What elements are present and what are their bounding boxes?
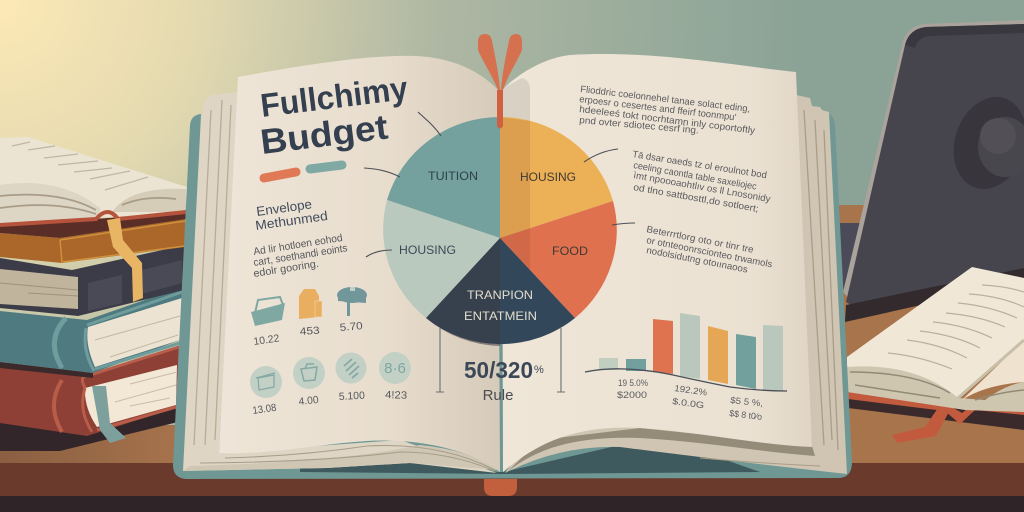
slice: housing right [500,117,613,238]
fold shade on pie [500,117,530,270]
laptop base [845,268,1024,322]
bar chart [585,313,787,422]
right paragraph two: od tlno sattbosttl,do sotloert; [632,182,759,215]
icon: pot badge [250,366,282,398]
spine shade band [500,78,530,290]
dark book [0,245,185,316]
envelope method text [253,232,348,280]
values: 5.100 [339,390,365,403]
slice: tuition [387,117,500,238]
right page [502,54,812,472]
orange book [0,213,186,263]
values: 10.22 [253,332,280,348]
icon: shopping bag [299,289,322,319]
teal book [0,287,182,378]
right paragraph one: erpoesr o cesertes and ffeirf toonmpu' [579,94,737,123]
red book [0,346,179,436]
slice: housing left [383,200,500,318]
title: Fullchimy [258,69,410,124]
slice: food [500,201,617,318]
label: entertainment: ENTATMEIN [464,309,537,323]
left page stack [183,92,497,473]
label: food: FOOD [552,244,588,258]
chart labels: $2000 [617,390,647,400]
icon row: expenses [251,287,367,348]
shadow under stack [0,405,178,451]
laptop lid [846,24,1024,308]
label: housing right: HOUSING [520,170,576,184]
values: 13.08 [252,402,277,417]
left page [219,56,500,472]
open book on the right [847,267,1024,443]
chart labels: $$ 8 t0⁄o [729,408,763,422]
values: 4.00 [298,394,319,408]
label: housing left: HOUSING [399,243,456,257]
pie chart [383,117,617,346]
yellow ribbon [107,218,143,302]
right paragraph one: pnd ovter sdiotec cesrf ing. [579,115,699,136]
envelope method heading: Methunmed [254,208,329,233]
right page stack [505,95,847,474]
values [252,389,407,417]
right paragraph one [579,84,756,137]
ribbon [892,402,951,443]
leader lines [364,112,635,392]
teal ribbon [92,386,126,443]
cover [173,113,852,479]
bottom ribbon tab [484,479,517,496]
icon: number badge: 8·6 [384,360,406,377]
values: 4!23 [385,389,407,402]
envelope method text: Ad lir hotloen eohod [253,232,344,258]
bookmark ribbon [478,34,522,128]
chart axis [585,369,787,391]
main open book [173,54,852,496]
laptop logo [942,87,1024,199]
envelope method heading [254,196,329,233]
slice: transportation [426,238,575,344]
right paragraph two: ceeling caontla table saxeliojec [632,160,758,193]
chart labels [617,378,764,422]
chart labels: $5 5 %, [730,395,764,408]
right paragraph one: hdeeleeś tokt nocrhtamn inly coportoftly [579,104,756,137]
icon: bag badge [293,357,325,389]
values: 453 [299,325,320,338]
values: 5.70 [339,320,363,334]
chart labels: 192.2% [674,383,708,398]
right paragraph three: Beterrrtlorg oto or tinr tre [645,224,755,256]
icon: basket [251,297,285,326]
laptop lid rim [843,20,1024,300]
open book on top of stack [0,137,187,225]
title accent pills [264,165,342,178]
50/30/20 rule [464,357,544,404]
values [253,320,363,348]
label: tuition: TUITION [428,169,478,183]
right paragraph two: Tā dsar oaeds tz ol eroulnot bod [632,149,768,181]
icon: number badge [379,352,411,384]
envelope method heading: Envelope [255,196,313,219]
fold shade on dark slice [426,238,500,346]
right paragraph two [632,149,772,215]
keyboard sliver [838,223,860,292]
icon row: circles [250,352,411,417]
50/30/20 rule: Rule [483,387,513,404]
title [258,69,410,162]
pages [847,365,1024,412]
desk surface [0,205,1024,512]
envelope method text: edolr gooring. [253,258,320,280]
right paragraph two: ìmt npoooaohtlıv os ll Lnosonidy [632,170,772,205]
right paragraph three [645,224,773,276]
right paragraph one: Flioddric coelonnehel tanae solact eding, [580,84,751,115]
laptop [838,20,1024,322]
50/30/20 rule: % [534,364,544,376]
right paragraph three: nodolsidutng otoıınaoos [645,245,749,276]
label: transportation: TRANPION [467,288,533,302]
50/30/20 rule: 50/320 [464,357,533,383]
title: Budget [258,108,390,162]
chart labels: $.0.0G [672,396,705,410]
icon: table [337,287,367,316]
envelope method text: cart, soethandi eoints [253,242,348,269]
chart labels: 19 5.0% [618,378,648,388]
stack of books on the left [0,137,187,451]
icon: hand badge [336,352,366,384]
right paragraph three: or otnteoonrscionteo trwamols [645,235,773,270]
